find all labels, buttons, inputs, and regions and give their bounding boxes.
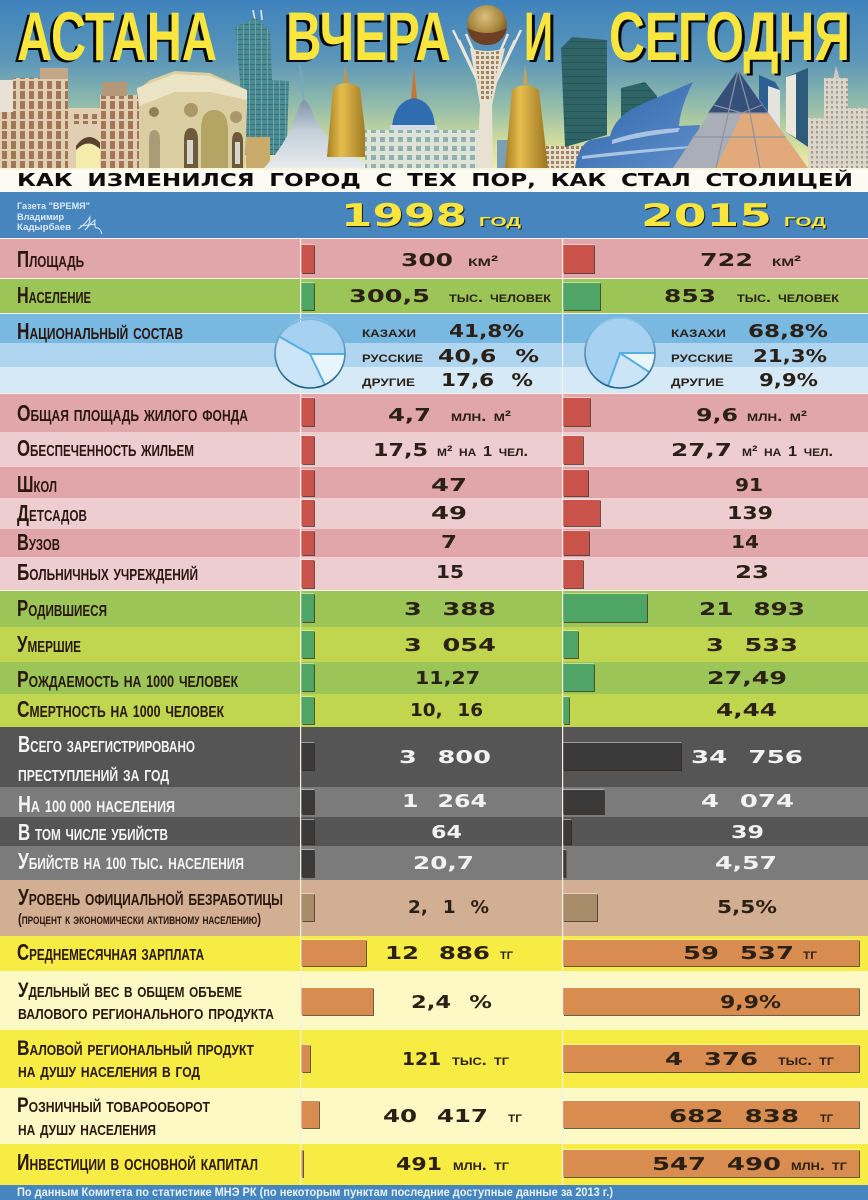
column header band bbox=[0, 192, 868, 238]
row: Площадь bbox=[0, 239, 868, 278]
value 2015: 853 bbox=[664, 287, 716, 307]
bar 2015 bbox=[563, 436, 583, 464]
bar 2015 bbox=[563, 820, 571, 844]
value 2015: 23 bbox=[735, 563, 769, 583]
value 2015: 3 533 bbox=[706, 636, 798, 656]
building: small glass tower bbox=[621, 82, 657, 122]
bar 1998 bbox=[302, 790, 314, 814]
row: Розничный товарооборот: на душу населения bbox=[18, 1116, 156, 1140]
row: Больничных учреждений: Больничных учреждений bbox=[17, 559, 198, 585]
building: KazMunaiGas bbox=[0, 68, 139, 168]
value 1998: 47 bbox=[431, 476, 467, 496]
value 2015: 4 074 bbox=[701, 792, 794, 812]
value 1998: 1 264 bbox=[402, 792, 487, 812]
building: Baiterek tower bbox=[453, 5, 521, 168]
bar 2015 bbox=[563, 500, 600, 526]
row: Убийств на 100 тыс. населения bbox=[0, 846, 868, 880]
row: Всего зарегистрировано преступлений за год: преступлений за год bbox=[18, 760, 169, 786]
value 1998 bbox=[383, 1107, 523, 1127]
value 1998: 300 bbox=[401, 251, 453, 271]
value 2015: 547 490 bbox=[652, 1155, 781, 1175]
bar 2015 bbox=[563, 988, 859, 1015]
row: Обеспеченность жильем: Обеспеченность жильем bbox=[17, 435, 194, 461]
row: Вузов: Вузов bbox=[17, 529, 60, 555]
building: right side towers bbox=[759, 66, 868, 168]
bar 1998 bbox=[302, 500, 314, 526]
shares 1998: 40,6 % bbox=[438, 347, 539, 367]
value 1998: 4,7 bbox=[388, 406, 431, 426]
row: На 100 000 населения: На 100 000 населения bbox=[18, 791, 175, 817]
value 1998: 2,4 % bbox=[411, 993, 492, 1013]
value 1998: 40 417 bbox=[383, 1107, 488, 1127]
value 2015: 59 537 bbox=[683, 944, 794, 964]
subtitle band bbox=[0, 168, 868, 192]
value 2015: 682 838 bbox=[669, 1107, 799, 1127]
row: Уровень официальной безработицы bbox=[0, 880, 868, 936]
building: Khan Shatyr tent bbox=[264, 65, 380, 168]
bar 2015 bbox=[563, 790, 604, 814]
row: Розничный товарооборот: Розничный товарооборот bbox=[17, 1093, 210, 1117]
row: Среднемесячная зарплата bbox=[0, 936, 868, 971]
bar 1998 bbox=[302, 560, 314, 588]
row: Всего зарегистрировано преступлений за год bbox=[0, 727, 868, 787]
value 2015: 5,5% bbox=[717, 898, 777, 918]
bar 2015 bbox=[563, 1101, 859, 1128]
row: Убийств на 100 тыс. населения: Убийств на 100 тыс. населения bbox=[18, 848, 244, 874]
bar 1998 bbox=[302, 245, 314, 273]
bar 1998 bbox=[302, 894, 314, 921]
title: ВЧЕРА bbox=[286, 0, 451, 75]
value 1998: м² на 1 чел. bbox=[437, 443, 528, 460]
row: Национальный состав: Национальный состав bbox=[17, 318, 183, 344]
year 2015 bbox=[641, 198, 827, 234]
shares 2015: 9,9% bbox=[759, 371, 818, 391]
bar 2015 bbox=[563, 664, 594, 691]
value 2015 bbox=[665, 1050, 835, 1070]
value 1998 bbox=[385, 944, 514, 964]
value 1998: млн. тг bbox=[453, 1157, 510, 1174]
value 1998: 491 bbox=[396, 1155, 442, 1175]
bar 1998 bbox=[302, 436, 314, 464]
bar 1998 bbox=[302, 398, 314, 426]
bar 1998 bbox=[302, 988, 373, 1015]
building: gold tower left bbox=[327, 65, 368, 157]
year 2015: год bbox=[784, 210, 827, 231]
bar 1998 bbox=[302, 531, 314, 555]
value 1998: тыс. человек bbox=[449, 289, 551, 306]
row: Удельный вес: валового регионального продукта bbox=[18, 1000, 274, 1024]
value 1998 bbox=[402, 1050, 510, 1070]
value 2015: 39 bbox=[731, 823, 764, 843]
title bbox=[17, 0, 850, 75]
row: В том числе убийств: В том числе убийств bbox=[18, 819, 168, 845]
row: Умершие: Умершие bbox=[17, 631, 81, 657]
row: Валовой региональный продукт bbox=[0, 1030, 868, 1088]
value 1998: тг bbox=[500, 946, 514, 963]
row: Родившиеся bbox=[0, 591, 868, 627]
row: Удельный вес: Удельный вес в общем объеме bbox=[18, 978, 242, 1002]
shares 2015: 21,3% bbox=[753, 347, 827, 367]
building: pyramid bbox=[673, 70, 808, 168]
value 1998: 10, 16 bbox=[410, 701, 483, 721]
shares 2015: другие bbox=[671, 373, 724, 390]
value 1998: 300,5 bbox=[349, 287, 430, 307]
value 2015: 4,44 bbox=[716, 701, 777, 721]
shares 1998: казахи bbox=[362, 324, 416, 341]
value 2015 bbox=[696, 406, 807, 426]
building: triumphal arch bbox=[137, 71, 270, 168]
value 1998: тыс. тг bbox=[452, 1052, 510, 1069]
value 1998: 3 800 bbox=[399, 748, 491, 768]
row: Удельный вес bbox=[0, 971, 868, 1030]
title: АСТАНА bbox=[17, 0, 217, 75]
value 1998: 17,5 bbox=[373, 441, 428, 461]
value 1998: 15 bbox=[436, 563, 464, 583]
value 2015: 27,7 bbox=[671, 441, 732, 461]
value 1998: 49 bbox=[431, 504, 467, 524]
value 2015: тг bbox=[803, 946, 818, 963]
shares 2015: русские bbox=[671, 349, 733, 366]
value 2015 bbox=[669, 1107, 834, 1127]
credits bbox=[17, 201, 102, 234]
bar 1998 bbox=[302, 1101, 319, 1128]
bar 1998 bbox=[302, 1045, 310, 1072]
bar 1998 bbox=[302, 470, 314, 496]
credits: Газета "ВРЕМЯ" bbox=[17, 201, 90, 212]
row: Розничный товарооборот bbox=[0, 1088, 868, 1144]
value 1998 bbox=[349, 287, 551, 307]
bar 2015 bbox=[563, 697, 569, 724]
row: Валовой региональный продукт: на душу населения в год bbox=[18, 1058, 200, 1082]
value 2015: 91 bbox=[735, 476, 763, 496]
value 1998: тг bbox=[508, 1109, 523, 1126]
value 1998: км² bbox=[468, 253, 498, 270]
value 2015: 9,6 bbox=[696, 406, 738, 426]
shares 2015: казахи bbox=[671, 324, 726, 341]
value 1998 bbox=[396, 1155, 510, 1175]
row: Площадь: Площадь bbox=[17, 246, 84, 272]
row: Обеспеченность жильем bbox=[0, 432, 868, 467]
bar 1998 bbox=[302, 697, 314, 724]
bar 2015 bbox=[563, 531, 589, 555]
row: Умершие bbox=[0, 627, 868, 662]
row: Инвестиции в основной капитал bbox=[0, 1144, 868, 1185]
value 1998: 20,7 bbox=[413, 854, 474, 874]
value 2015: км² bbox=[772, 253, 801, 270]
pie chart 2015 bbox=[585, 318, 655, 388]
value 1998: 121 bbox=[402, 1050, 441, 1070]
shares 1998: 17,6 % bbox=[441, 371, 533, 391]
bar 2015 bbox=[563, 850, 566, 877]
bar 2015 bbox=[563, 940, 859, 966]
value 2015: 21 893 bbox=[699, 600, 805, 620]
bar 2015 bbox=[563, 245, 594, 273]
shares 2015: 68,8% bbox=[748, 322, 828, 342]
shares 1998: русские bbox=[362, 349, 423, 366]
row: Инвестиции в основной капитал: Инвестиции в основной капитал bbox=[17, 1149, 258, 1175]
year 1998 bbox=[341, 198, 522, 234]
value 2015 bbox=[683, 944, 818, 964]
value 2015 bbox=[664, 287, 839, 307]
row: Население: Население bbox=[17, 282, 91, 308]
row: Детсадов bbox=[0, 498, 868, 529]
row: Уровень официальной безработицы: (процент к экономически активному населению) bbox=[18, 911, 261, 928]
shares 2015 bbox=[671, 322, 828, 391]
bar 1998 bbox=[302, 850, 314, 877]
row: Школ bbox=[0, 467, 868, 498]
year 2015: 2015 bbox=[641, 198, 772, 234]
value 1998: 3 388 bbox=[404, 600, 496, 620]
value 2015 bbox=[652, 1155, 848, 1175]
value 1998: 3 054 bbox=[404, 636, 496, 656]
value 1998: 11,27 bbox=[415, 669, 480, 689]
building: teal tower bbox=[235, 10, 289, 155]
building: gold tower right and low blocks bbox=[497, 65, 593, 168]
bar 1998 bbox=[302, 631, 314, 658]
bar 1998 bbox=[302, 1150, 303, 1177]
bar 1998 bbox=[302, 283, 314, 310]
value 2015: 34 756 bbox=[691, 748, 803, 768]
value 2015: 722 bbox=[700, 251, 753, 271]
value 2015: 4,57 bbox=[715, 854, 777, 874]
bar 2015 bbox=[563, 594, 647, 622]
bar 1998 bbox=[302, 940, 366, 966]
row: Больничных учреждений bbox=[0, 557, 868, 590]
row: Общая площадь жилого фонда bbox=[0, 394, 868, 432]
row: Детсадов: Детсадов bbox=[17, 500, 87, 526]
row: На 100 000 населения bbox=[0, 787, 868, 817]
row: Уровень официальной безработицы: Уровень официальной безработицы bbox=[18, 884, 283, 910]
credits: Кадырбаев bbox=[17, 222, 71, 233]
row: Рождаемость на 1000 человек bbox=[0, 662, 868, 694]
value 2015: тг bbox=[820, 1109, 834, 1126]
value 2015: 139 bbox=[727, 504, 773, 524]
value 2015: тыс. тг bbox=[778, 1052, 835, 1069]
value 2015: м² на 1 чел. bbox=[742, 443, 833, 460]
pie chart 1998 bbox=[275, 318, 345, 388]
shares 1998 bbox=[362, 322, 539, 391]
value 1998 bbox=[401, 251, 498, 271]
building: Ak Orda bbox=[365, 65, 480, 168]
bar 2015 bbox=[563, 398, 590, 426]
value 1998 bbox=[388, 406, 511, 426]
bar 2015 bbox=[563, 631, 578, 658]
value 1998: 7 bbox=[441, 533, 457, 553]
value 2015: тыс. человек bbox=[737, 289, 839, 306]
row: Население bbox=[0, 279, 868, 313]
value 2015: 14 bbox=[731, 533, 759, 553]
row: Школ: Школ bbox=[17, 471, 57, 497]
credits: Владимир bbox=[17, 212, 64, 223]
year 1998: 1998 bbox=[341, 198, 467, 234]
row: Смертность на 1000 человек bbox=[0, 694, 868, 727]
footer source note: По данным Комитета по статистике МНЭ РК (по некоторым пунктам последние доступные данные за 2013 г.) bbox=[17, 1187, 613, 1199]
bar 2015 bbox=[563, 743, 681, 770]
title: И bbox=[524, 0, 553, 75]
row: Смертность на 1000 человек: Смертность на 1000 человек bbox=[17, 696, 224, 722]
row: Общая площадь жилого фонда: Общая площадь жилого фонда bbox=[17, 400, 248, 426]
building: concert hall bbox=[575, 82, 700, 168]
shares 1998: 41,8% bbox=[449, 322, 524, 342]
row: Национальный состав bbox=[0, 314, 868, 393]
value 1998: 12 886 bbox=[385, 944, 490, 964]
subtitle: КАК ИЗМЕНИЛСЯ ГОРОД С ТЕХ ПОР, КАК СТАЛ СТОЛИЦЕЙ bbox=[17, 169, 853, 191]
shares 1998: другие bbox=[362, 373, 415, 390]
row: В том числе убийств bbox=[0, 817, 868, 846]
value 1998: 2, 1 % bbox=[408, 898, 489, 918]
row: Рождаемость на 1000 человек: Рождаемость на 1000 человек bbox=[17, 666, 238, 692]
value 2015: 9,9% bbox=[720, 993, 781, 1013]
building: dark glass tower bbox=[561, 37, 607, 147]
value 2015 bbox=[700, 251, 801, 271]
value 1998 bbox=[373, 441, 528, 461]
row: Валовой региональный продукт: Валовой региональный продукт bbox=[17, 1036, 254, 1060]
row: Родившиеся: Родившиеся bbox=[17, 595, 107, 621]
bar 1998 bbox=[302, 743, 314, 770]
value 1998: млн. м² bbox=[451, 408, 511, 425]
value 2015: 27,49 bbox=[707, 669, 787, 689]
bar 1998 bbox=[302, 594, 314, 622]
bar 2015 bbox=[563, 1045, 859, 1072]
value 2015: 4 376 bbox=[665, 1050, 758, 1070]
bar 2015 bbox=[563, 1150, 859, 1177]
bar 2015 bbox=[563, 894, 597, 921]
row: Вузов bbox=[0, 529, 868, 557]
bar 1998 bbox=[302, 820, 314, 844]
year 1998: год bbox=[479, 210, 522, 231]
value 1998: 64 bbox=[431, 823, 462, 843]
value 2015: млн. тг bbox=[791, 1157, 848, 1174]
bar 2015 bbox=[563, 470, 588, 496]
value 2015 bbox=[671, 441, 833, 461]
row: Всего зарегистрировано преступлений за год: Всего зарегистрировано bbox=[18, 731, 195, 757]
value 2015: млн. м² bbox=[747, 408, 807, 425]
bar 2015 bbox=[563, 283, 600, 310]
footer source note bbox=[0, 1185, 868, 1200]
header: skyline banner bbox=[0, 0, 868, 192]
bar 2015 bbox=[563, 560, 583, 588]
row: Среднемесячная зарплата: Среднемесячная зарплата bbox=[17, 939, 204, 965]
bar 1998 bbox=[302, 664, 314, 691]
